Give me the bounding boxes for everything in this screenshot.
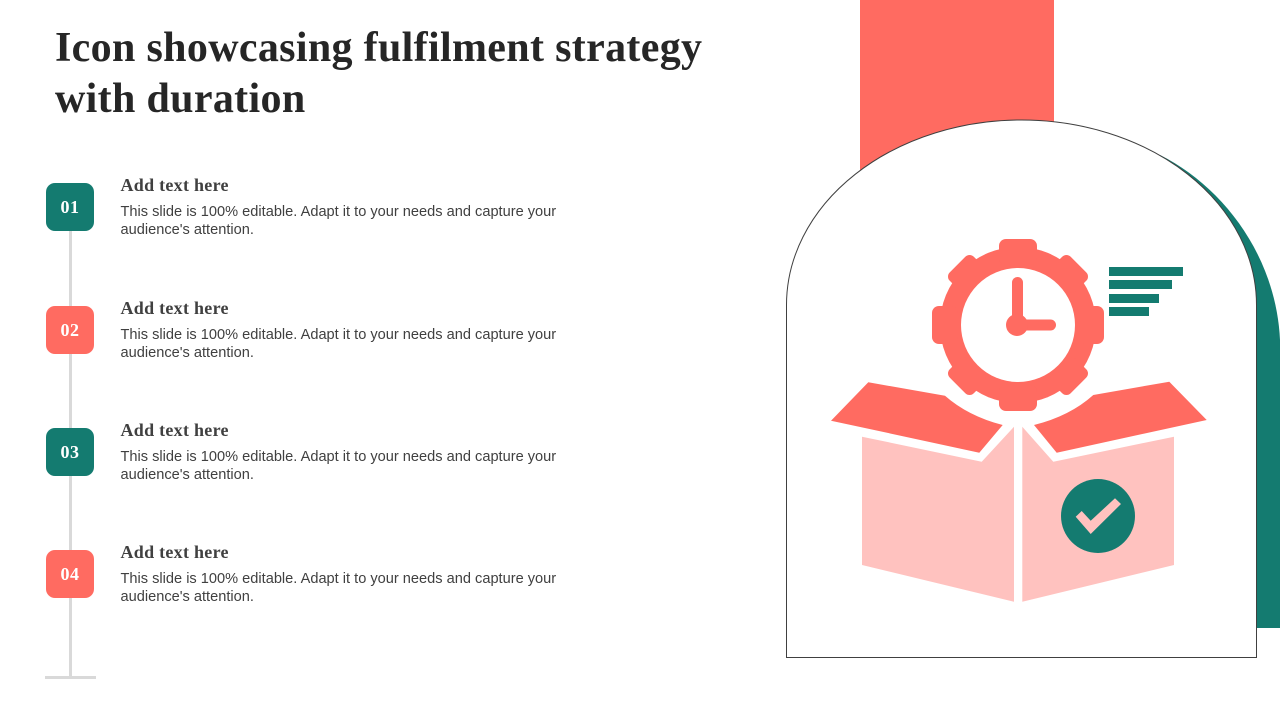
title: with duration: [55, 76, 306, 122]
badge 03: [46, 428, 94, 476]
box right face: [1022, 427, 1174, 602]
text block 02: This slide is 100% editable. Adapt it to your needs and capture your: [120, 327, 556, 343]
text block 04: This slide is 100% editable. Adapt it to your needs and capture your: [120, 571, 556, 587]
box left flap: [831, 382, 1003, 453]
text block 03: audience's attention.: [120, 467, 254, 483]
box right flap: [1034, 382, 1207, 453]
text block 04: [120, 542, 556, 605]
text block 02: Add text here: [120, 298, 229, 318]
title: Icon showcasing fulfilment strategy: [55, 25, 702, 71]
text block 02: audience's attention.: [120, 345, 254, 361]
text block 04: Add text here: [120, 542, 229, 562]
text block 01: audience's attention.: [120, 222, 254, 238]
clock hands: [1006, 277, 1056, 336]
badge 04: 04: [60, 564, 80, 584]
teal arch shadow: [1160, 155, 1280, 628]
text block 03: [120, 420, 556, 483]
text block 02: [120, 298, 556, 361]
badge 04: [46, 550, 94, 598]
check badge: [1061, 479, 1135, 553]
badge 03: 03: [60, 442, 80, 462]
text block 03: This slide is 100% editable. Adapt it to your needs and capture your: [120, 449, 556, 465]
badge 01: [46, 183, 94, 231]
title: [55, 25, 702, 122]
icon: open box: [831, 382, 1207, 602]
icon: duration bars: [1109, 267, 1183, 316]
text block 04: audience's attention.: [120, 589, 254, 605]
badge 02: 02: [60, 320, 80, 340]
timeline: vertical line with foot: [69, 231, 72, 679]
text block 01: Add text here: [120, 175, 229, 195]
text block 01: [120, 175, 556, 238]
badge 01: 01: [60, 197, 80, 217]
text block 01: This slide is 100% editable. Adapt it to your needs and capture your: [120, 204, 556, 220]
timeline foot: [45, 676, 96, 679]
badge 02: [46, 306, 94, 354]
white arch panel: [786, 120, 1256, 658]
text block 03: Add text here: [120, 420, 229, 440]
icon: gear with clock: [932, 239, 1104, 411]
box left face: [862, 427, 1014, 602]
coral rectangle behind arch: [860, 0, 1054, 200]
